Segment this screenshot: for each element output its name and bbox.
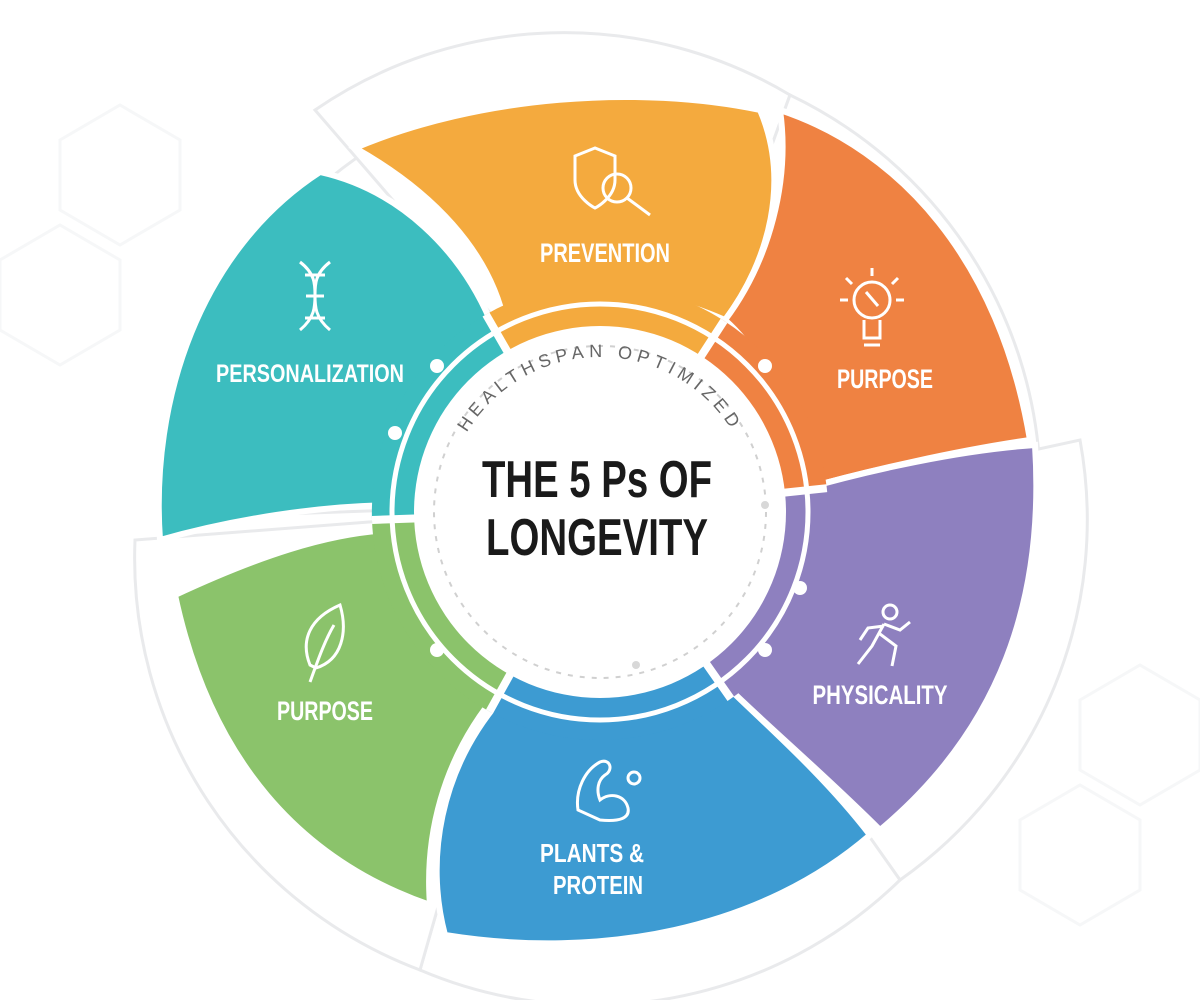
segment: plants & protein: PROTEIN (553, 870, 643, 900)
segment: plants & protein: PLANTS & (540, 838, 644, 868)
segment: prevention (355, 97, 774, 325)
segment: purpose orange (725, 110, 1030, 490)
segment: personalization: PERSONALIZATION (216, 360, 404, 388)
segment: physicality: PHYSICALITY (812, 680, 948, 710)
center ring (388, 304, 808, 720)
segment: purpose green (175, 530, 500, 905)
center label: LONGEVITY (486, 509, 708, 567)
segment: plants & protein (437, 670, 870, 943)
center label: THE 5 Ps OF (482, 451, 712, 509)
outer frames (135, 33, 1087, 1005)
center label: HEALTHSPAN OPTIMIZED (457, 344, 738, 432)
segment: prevention: PREVENTION (540, 238, 670, 268)
segment: personalization (159, 172, 490, 540)
inner colored band (372, 284, 828, 740)
center label (457, 344, 738, 567)
segment: purpose green: PURPOSE (277, 696, 373, 726)
segment: physicality (710, 445, 1036, 830)
segment: purpose orange: PURPOSE (837, 364, 933, 394)
